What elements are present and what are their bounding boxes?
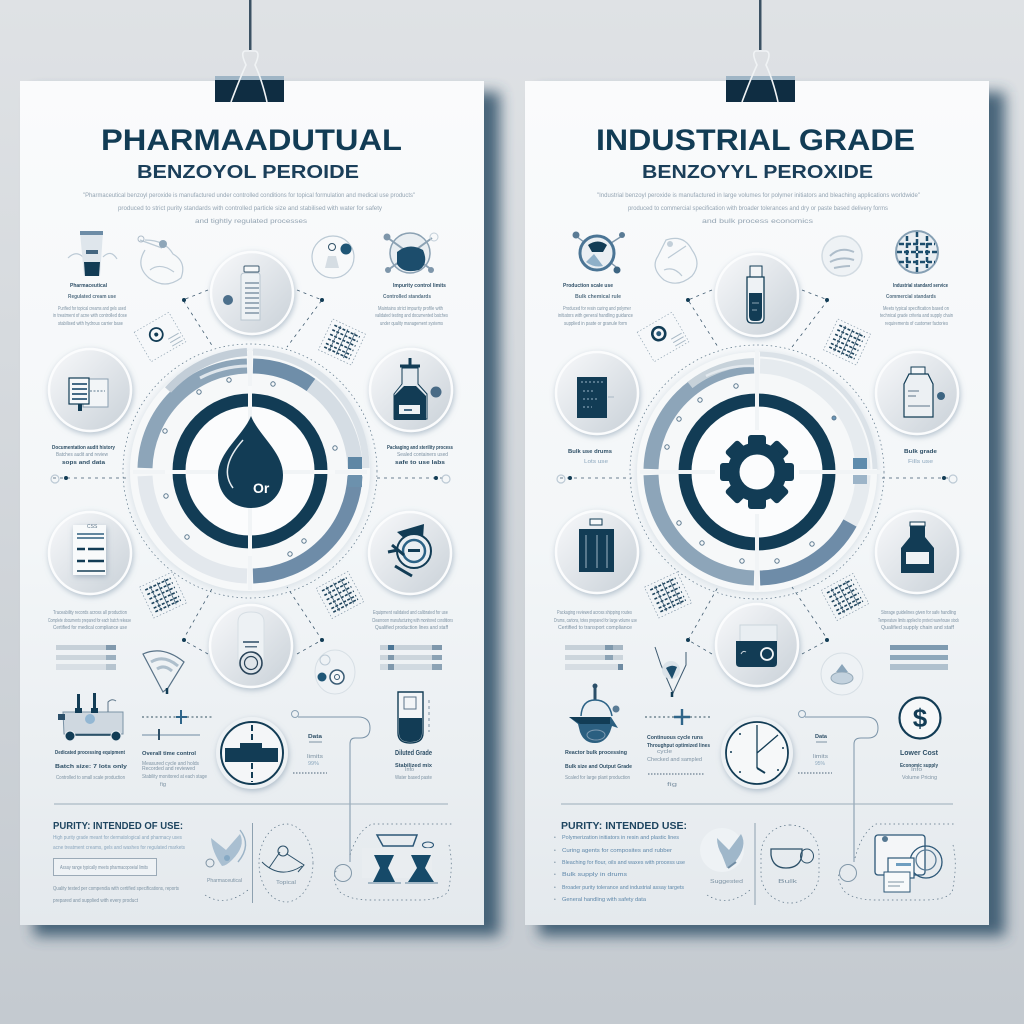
caption: clock notes xyxy=(798,734,832,773)
bullet list: Broader purity tolerance and industrial assay targets xyxy=(562,885,685,891)
icon: oval application: Topical xyxy=(276,880,296,886)
icon: pattern lower right xyxy=(821,574,869,620)
caption: timeline: Throughput optimized lines xyxy=(647,743,710,749)
caption: top left: Bulk chemical rule xyxy=(575,294,621,300)
icon: crossed molecule xyxy=(384,233,438,273)
caption: timeline: Continuous cycle runs xyxy=(647,735,703,741)
captions: side circles upper: Lots use xyxy=(584,459,608,465)
caption: timeline: Stability monitored at each stage xyxy=(142,774,207,780)
divider xyxy=(54,803,448,805)
captions: side circles upper: Packaging and sterility process xyxy=(387,445,453,451)
icon: faint vessel xyxy=(821,653,863,695)
icon: faint molecule left xyxy=(138,236,183,284)
outer ring segments xyxy=(651,354,875,578)
section: purity and intended use xyxy=(53,821,452,904)
icon: gear xyxy=(720,435,794,509)
caption: gauge notes: 99% xyxy=(308,761,320,767)
inner dark ring xyxy=(179,400,321,542)
vertical separator xyxy=(252,823,254,903)
bullet list: • xyxy=(554,848,556,854)
spec box xyxy=(54,858,156,876)
subtitle: benzoyl peroxide: BENZOYYL PEROXIDE xyxy=(642,162,873,182)
captions: side circles lower: Temperature limits applied to protect warehouse stock xyxy=(878,618,959,624)
caption: top left xyxy=(558,283,633,327)
caption: test tube xyxy=(395,750,433,781)
icon: tube xyxy=(68,231,117,276)
spec box: Assay range typically meets pharmacopoeial limits xyxy=(60,865,148,871)
caption: top left: Regulated cream use xyxy=(68,294,116,300)
bar legend left xyxy=(565,645,623,670)
bullet list: • xyxy=(554,872,556,878)
intro paragraph xyxy=(597,193,920,225)
caption: cost xyxy=(900,750,939,781)
notes xyxy=(53,886,179,904)
captions: side circles lower: Equipment validated and calibrated for use xyxy=(373,610,448,616)
bar legend right xyxy=(380,645,442,670)
binder clip left xyxy=(215,0,284,102)
caption: top left: supplied in paste or granule form xyxy=(564,321,627,327)
caption: top right: Impurity control limits xyxy=(393,283,446,289)
caption: cost: Volume Pricing xyxy=(902,775,937,781)
caption: clock notes: Data xyxy=(815,734,828,740)
caption: top left: initiators with general handling guidance xyxy=(558,313,633,319)
bullet list: • xyxy=(554,835,556,841)
icon: dollar: $ xyxy=(913,703,928,733)
divider xyxy=(561,803,953,805)
captions: side circles upper: Bulk use drums xyxy=(568,449,612,455)
connector line to use panel xyxy=(798,710,878,862)
caption: equipment: Controlled to small scale production xyxy=(56,775,125,781)
notes: prepared and supplied with every product xyxy=(53,898,139,904)
icon: funnel waves xyxy=(143,651,184,694)
icon: faint flask right xyxy=(312,236,354,278)
caption: top right: Maintains strict impurity profile with xyxy=(378,306,443,312)
bar legend right xyxy=(890,645,948,670)
bullet list: • xyxy=(554,860,556,866)
node: bottom device xyxy=(210,605,292,687)
captions: side circles lower: Storage guidelines given for safe handling xyxy=(881,610,956,616)
outer ring segments xyxy=(145,352,366,576)
caption: top left: Pharmaceutical xyxy=(70,283,107,289)
central ring chart: gear xyxy=(637,350,880,592)
caption: top left: Production scale use xyxy=(563,283,613,289)
node: upper right bottle xyxy=(370,349,452,431)
intro paragraph: and bulk process economics xyxy=(702,219,813,225)
caption: test tube: Water based paste xyxy=(395,775,432,781)
captions: side circles upper: Fills use xyxy=(908,459,933,465)
caption: timeline: Overall time control xyxy=(142,751,196,757)
icon: pattern lower right xyxy=(316,572,364,618)
icon: funnel xyxy=(655,647,686,697)
icon: oval cup: Bulk xyxy=(778,879,798,885)
caption: top right: technical grade criteria and supply chain xyxy=(880,313,953,319)
captions: side circles lower: Drums, cartons, totes prepared for large volume use xyxy=(554,618,637,624)
icon: dashed blob with hourglass jars xyxy=(334,824,452,900)
caption: top right xyxy=(375,283,448,327)
caption: timeline: Recorded and reviewed xyxy=(142,766,195,772)
caption: clock notes: 95% xyxy=(815,761,826,767)
icon: grid globe xyxy=(896,231,938,273)
captions: side circles upper: Documentation audit history xyxy=(52,445,116,451)
caption: gauge notes: Data xyxy=(308,734,323,740)
caption: test tube: Diluted Grade xyxy=(395,750,432,757)
captions: side circles lower: Qualified production lines and staff xyxy=(375,625,449,631)
bullet list: Polymerization initiators in resin and plastic lines xyxy=(562,835,680,841)
description: acne treatment creams, gels and washes for regulated markets xyxy=(53,845,185,851)
node: upper right jar xyxy=(876,352,958,434)
binder clip right xyxy=(726,0,795,102)
panel shadow: right xyxy=(539,92,1005,936)
caption: reactor xyxy=(565,750,632,781)
icon: heart check xyxy=(700,828,750,900)
node: lower right mechanism xyxy=(369,512,451,594)
bullet list: • xyxy=(554,885,556,891)
icon: oval cup xyxy=(761,825,819,903)
caption: cost: Economic supply xyxy=(900,763,939,769)
icon: dashed blob with devices xyxy=(839,824,956,900)
dashed orbit xyxy=(123,344,377,598)
icon: pattern upper left xyxy=(637,312,689,362)
icon: pattern upper left xyxy=(134,312,186,362)
caption: top right: Meets typical specification based on xyxy=(883,306,949,312)
captions: side circles lower: Traceability records across all production xyxy=(53,610,127,616)
dashed orbit xyxy=(630,345,884,599)
icon: heart check: Suggested xyxy=(710,879,743,885)
intro paragraph: "Pharmaceutical benzoyl peroxide is manufactured under controlled conditions for topical formulation and medical use products" xyxy=(83,193,415,199)
captions: side circles lower: Certified for medical compliance use xyxy=(53,625,127,631)
captions: side circles upper: safe to use labs xyxy=(395,460,445,466)
icon: dollar xyxy=(900,698,940,738)
icon: molecule globe xyxy=(572,232,625,274)
caption: equipment xyxy=(55,750,128,781)
icon: oil drop xyxy=(218,416,283,508)
caption: cost: Info xyxy=(911,767,922,773)
intro paragraph xyxy=(83,193,415,225)
captions: side circles lower xyxy=(554,610,959,631)
icon: oval application xyxy=(259,824,313,902)
bullet list: Curing agents for composites and rubber xyxy=(562,848,672,854)
caption: test tube: Info xyxy=(405,767,414,773)
connector lines xyxy=(51,290,450,654)
caption: timeline xyxy=(645,709,712,788)
heading: PURITY: INTENDED USE: xyxy=(561,821,687,832)
icon: heart check xyxy=(205,830,248,900)
caption: reactor: Bulk size and Output Grade xyxy=(565,764,632,770)
connector line to use panel xyxy=(292,710,370,862)
icon: pattern lower left xyxy=(140,572,186,618)
icon: clock xyxy=(721,717,793,789)
caption: top left: in treatment of acne with controlled dose xyxy=(53,313,127,319)
caption: timeline: Checked and sampled xyxy=(647,757,702,763)
caption: reactor: Scaled for large plant production xyxy=(565,775,630,781)
captions: side circles lower: Complete documents prepared for each batch release xyxy=(48,618,131,624)
icon: oil drop: Or xyxy=(253,480,270,496)
caption: top right: Controlled standards xyxy=(383,294,431,300)
caption: top right xyxy=(880,283,953,327)
small ring markers xyxy=(163,378,337,556)
notes: Quality tested per compendia with certified specifications, reports xyxy=(53,886,179,892)
caption: cost: Lower Cost xyxy=(900,750,939,757)
caption: gauge notes xyxy=(293,734,327,773)
captions: side circles lower xyxy=(48,610,453,631)
icon: pattern upper right xyxy=(824,319,870,365)
icon: equipment vehicle xyxy=(58,693,123,741)
caption: equipment: Batch size: 7 lots only xyxy=(55,764,128,770)
captions: side circles lower: Certified to transport compliance xyxy=(558,625,632,631)
title: pharmaceutical: PHARMAADUTUAL xyxy=(101,124,402,157)
icon: faint flask xyxy=(315,650,355,694)
intro paragraph: and tightly regulated processes xyxy=(195,219,307,225)
panel: industrial grade xyxy=(525,81,989,925)
icon: test tube xyxy=(398,692,429,743)
intro paragraph: "Industrial benzoyl peroxide is manufactured in large volumes for polymer initiators and bleaching applications worldwide" xyxy=(597,193,920,199)
description: High purity grade meant for dermatological and pharmacy uses xyxy=(53,835,182,841)
caption: timeline: fig xyxy=(160,782,166,788)
node: upper left document xyxy=(49,349,131,431)
bullet list: General handling with safety data xyxy=(562,897,646,903)
caption: top left xyxy=(53,283,127,327)
node: lower left form: CSS xyxy=(87,524,98,530)
caption: top right: validated testing and documented batches xyxy=(375,313,448,319)
bullet list: • xyxy=(554,897,556,903)
captions: side circles upper: Batches audit and review xyxy=(56,452,108,458)
caption: top left: Purified for topical creams and gels used xyxy=(58,306,126,312)
central ring chart: drop xyxy=(130,350,370,591)
section: purity and intended use xyxy=(554,821,956,905)
captions: side circles upper: Sealed containers used xyxy=(397,452,448,458)
caption: top right: Commercial standards xyxy=(886,294,936,300)
bullet list: Bleaching for flour, oils and waxes with process use xyxy=(562,860,685,866)
captions: side circles upper xyxy=(568,449,937,465)
node: upper left screen xyxy=(556,352,638,434)
panel: pharmaceutical grade xyxy=(20,81,484,925)
inner dark ring xyxy=(685,400,829,544)
caption: equipment: Dedicated processing equipment xyxy=(55,750,125,756)
node: lower right bottle xyxy=(876,511,958,593)
captions: side circles upper xyxy=(52,445,453,466)
node: lower left container xyxy=(556,511,638,593)
captions: side circles lower: Cleanroom manufacturing with monitored conditions xyxy=(372,618,453,624)
bullet list: Bulk supply in drums xyxy=(562,872,628,878)
icon: faint molecule left xyxy=(655,238,697,283)
title: industrial grade: INDUSTRIAL GRADE xyxy=(596,124,915,157)
panel shadow: left xyxy=(34,92,500,936)
captions: side circles lower: Qualified supply chain and staff xyxy=(881,625,955,631)
caption: timeline: cycle xyxy=(657,749,672,755)
node: top bottle xyxy=(211,252,293,334)
caption: reactor: Reactor bulk processing xyxy=(565,750,627,756)
node: lower left form xyxy=(49,512,131,594)
small ring markers xyxy=(665,384,836,563)
node: top bottle xyxy=(716,254,798,336)
caption: top left: Produced for resin curing and polymer xyxy=(563,306,631,312)
caption: clock notes: limits xyxy=(813,754,829,760)
bar legend left xyxy=(56,645,116,670)
caption: top right: Industrial standard service xyxy=(893,283,948,289)
node: bottom device xyxy=(716,604,798,686)
caption: timeline: Measured cycle and holds xyxy=(142,761,199,767)
icon: gauge circle xyxy=(216,717,288,789)
heading: PURITY: INTENDED OF USE: xyxy=(53,821,183,832)
connector lines xyxy=(557,290,957,654)
caption: timeline xyxy=(142,710,212,788)
icon: pattern lower left xyxy=(645,572,691,618)
captions: side circles upper: sops and data xyxy=(62,460,106,466)
vertical separator xyxy=(754,823,756,905)
caption: timeline: fig xyxy=(667,782,677,788)
icon: faint disc right xyxy=(822,236,862,276)
intro paragraph: produced to commercial specification with broader tolerances and dry or paste based delivery forms xyxy=(628,206,888,212)
caption: top left: stabilised with hydrous carrier base xyxy=(58,321,123,327)
subtitle: benzoyl peroxide: BENZOYOL PEROIDE xyxy=(137,162,359,182)
caption: gauge notes: limits xyxy=(307,754,324,760)
captions: side circles lower: Packaging reviewed across shipping routes xyxy=(557,610,632,616)
bullet list xyxy=(554,835,685,903)
icon: heart check: Pharmaceutical xyxy=(207,878,242,884)
intro paragraph: produced to strict purity standards with controlled particle size and stabilised with water for safety xyxy=(118,206,382,212)
captions: side circles upper: Bulk grade xyxy=(904,449,937,455)
description xyxy=(53,835,185,851)
icon: reactor xyxy=(569,684,620,743)
icon: pattern upper right xyxy=(319,319,365,365)
caption: top right: requirements of customer factories xyxy=(885,321,948,327)
caption: test tube: Stabilized mix xyxy=(395,763,433,769)
caption: top right: under quality management systems xyxy=(380,321,443,327)
